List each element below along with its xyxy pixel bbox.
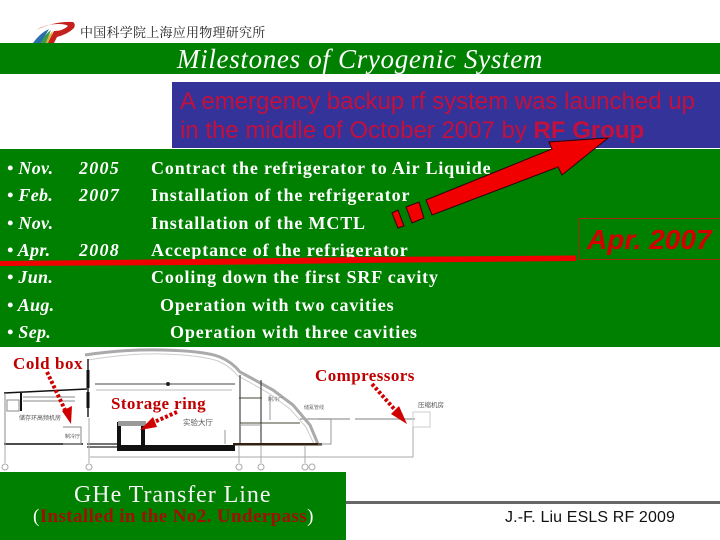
divider bar: [346, 501, 720, 504]
row: Aug.: [7, 295, 394, 315]
row: Jun.: • Jun.: [7, 267, 53, 287]
row: Apr. 2008: 2008: [79, 240, 120, 260]
row: Nov. 2005: Contract the refrigerator to Air Liquide: [151, 158, 491, 178]
title: Milestones of Cryogenic System: [177, 44, 543, 74]
date callout: Apr. 2007: Apr. 2007: [587, 224, 712, 255]
logo: institute name: 中国科学院上海应用物理研究所: [80, 22, 266, 41]
arrow: compressors pointer: [372, 384, 407, 424]
title banner: [0, 43, 720, 74]
row: Feb. 2007: 2007: [79, 185, 120, 205]
panel: GHe transfer line: [0, 472, 346, 540]
label: Storage ring: Storage ring: [111, 394, 206, 413]
date callout: Apr. 2007: [578, 218, 720, 260]
diagram: facility cross-section: 制冷厅: [65, 433, 80, 440]
logo: institute emblem: [33, 22, 75, 43]
roof: [85, 350, 318, 444]
row: Sep.: • Sep.: [7, 322, 51, 342]
row: Feb. 2007: • Feb.: [7, 185, 53, 205]
arrow: storage ring pointer: [140, 412, 177, 430]
label: Compressors: Compressors: [315, 366, 415, 385]
row: Aug.: Operation with two cavities: [160, 295, 394, 315]
row: Sep.: Operation with three cavities: [170, 322, 418, 342]
row: Nov.: • Nov.: [7, 213, 53, 233]
row: Nov.: [7, 213, 366, 233]
arrow: to RF Group: [391, 137, 610, 229]
diagram: facility cross-section: 储氦管线: [304, 404, 324, 411]
row: Apr. 2008: • Apr.: [7, 240, 50, 260]
red timeline underline: [0, 256, 576, 266]
subheading: (Installed in the No2. Underpass): [33, 506, 314, 527]
callout: emergency backup rf system: in the middle of October 2007 by RF Group: [180, 117, 644, 144]
diagram: facility cross-section: 储存环高频机房: [19, 413, 61, 422]
callout: emergency backup rf system: [172, 82, 720, 148]
row: Jun.: [7, 267, 439, 287]
row: Apr. 2008: Acceptance of the refrigerator: [151, 240, 409, 260]
diagram: facility cross-section: 制冷厂: [268, 396, 283, 403]
diagram: facility cross-section: 压缩机房: [418, 399, 444, 409]
diagram: facility cross-section: 实验大厅: [183, 417, 213, 428]
row: Jun.: Cooling down the first SRF cavity: [151, 267, 439, 287]
row: Aug.: • Aug.: [7, 295, 54, 315]
row: Nov. 2005: • Nov.: [7, 158, 53, 178]
arrow: cold box pointer: [47, 372, 72, 424]
callout: emergency backup rf system: A emergency backup rf system was launched up: [180, 88, 695, 115]
row: Sep.: [7, 322, 418, 342]
heading: GHe Transfer Line: [74, 482, 271, 508]
credit: J.-F. Liu ESLS RF 2009: [505, 509, 675, 526]
row: Feb. 2007: [7, 185, 410, 205]
arrows: diagram pointers: [45, 371, 407, 430]
row: Apr. 2008: [7, 240, 409, 260]
row: Nov. 2005: 2005: [79, 158, 120, 178]
row: Feb. 2007: Installation of the refrigerator: [151, 185, 410, 205]
panel: milestones timeline: [0, 149, 720, 347]
diagram: facility cross-section: [2, 348, 444, 470]
row: Nov.: Installation of the MCTL: [151, 213, 366, 233]
label: Cold box: Cold box: [13, 354, 83, 373]
